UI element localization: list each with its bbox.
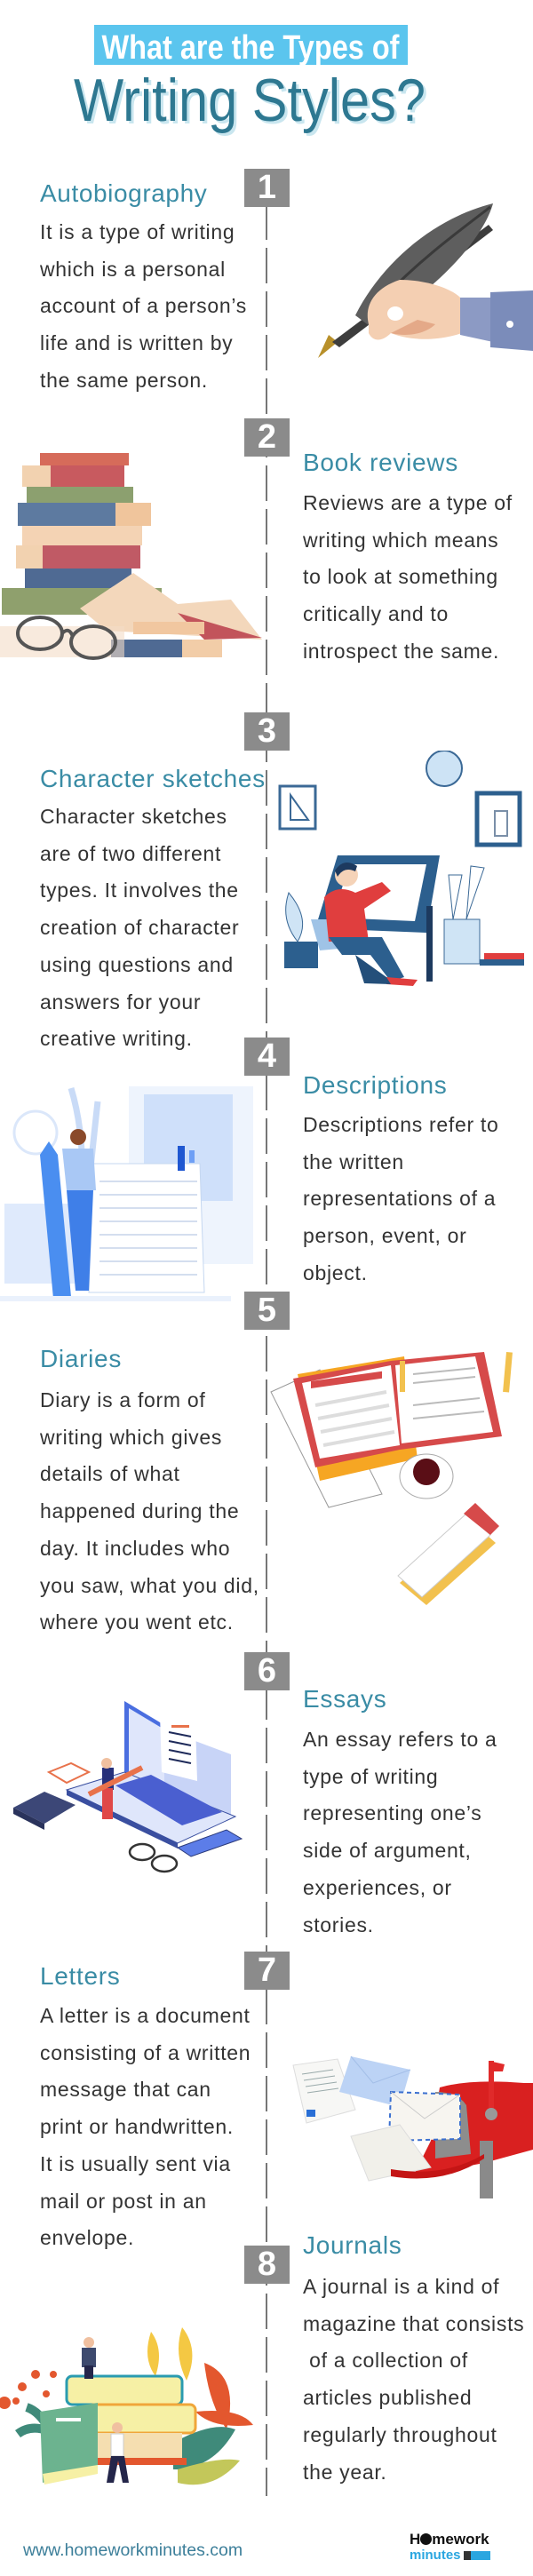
section 3 text: types. It involves the [40,879,239,902]
title banner [94,25,408,65]
icon: open diary with coffee [270,1352,513,1605]
footer url: www.homeworkminutes.com [23,2540,243,2560]
section 1 number [244,169,290,207]
timeline dashed line [266,207,267,2496]
section 6 number [244,1652,290,1690]
section 3 text: creation of character [40,916,239,939]
icon: person at drafting table [279,751,524,986]
section 4 number: 4 [258,1038,276,1075]
section 7 text: It is usually sent via [40,2152,231,2175]
section 5 number: 5 [258,1292,276,1329]
section 3 text: using questions and [40,953,234,976]
section 2 number: 2 [258,418,276,456]
section 2 text: Reviews are a type of [303,491,513,514]
section 5 text: writing which gives [40,1426,222,1449]
section 7 number [244,1952,290,1990]
section 7 text: consisting of a written [40,2041,251,2064]
section 7 text: A letter is a document [40,2004,251,2027]
logo [410,2531,490,2563]
section 4 text: representations of a [303,1187,496,1210]
icon: isometric laptop with person [13,1701,243,1872]
title [74,25,428,137]
section 6 text: side of argument, [303,1839,472,1862]
section 2 text [303,491,513,663]
section 4 number [244,1038,290,1076]
section 2 text: to look at something [303,565,498,588]
section 8 text: the year. [303,2461,387,2484]
title: Writing Styles? [76,69,428,137]
section 5 text: you saw, what you did, [40,1574,259,1597]
section 3 heading: Character sketches [40,765,266,792]
section 1 text [40,220,247,392]
section 2 heading: Book reviews [303,449,458,476]
section 1 text: which is a personal [40,258,226,281]
section 2 text: introspect the same. [303,640,499,663]
logo: H mework [410,2531,489,2548]
section 1 heading: Autobiography [40,179,207,207]
icon: person with giant pencil and paper [0,1086,253,1301]
section 7 text: message that can [40,2078,211,2101]
logo: minutes [410,2548,461,2563]
section 5 number [244,1292,290,1330]
section 4 text: Descriptions refer to [303,1113,499,1136]
section 4 text: the written [303,1150,404,1173]
section 3 number: 3 [258,712,276,750]
section 6 heading: Essays [303,1685,386,1713]
section 6 text: stories. [303,1913,374,1936]
section 3 text: are of two different [40,842,221,865]
section 5 text [40,1388,259,1634]
section 2 text: critically and to [303,602,449,625]
section 1 text: life and is written by [40,331,233,354]
section 8 text [303,2275,524,2484]
section 3 text: creative writing. [40,1027,193,1050]
icon: envelopes and red mailbox [293,2055,533,2198]
section 4 text: person, event, or [303,1224,467,1247]
section 5 text: details of what [40,1462,180,1485]
title: What are the Types of [101,29,400,67]
section 8 text: of a collection of [309,2349,468,2372]
section 1 text: account of a person’s [40,294,247,317]
section 7 text: print or handwritten. [40,2115,234,2138]
section 6 text: An essay refers to a [303,1728,497,1751]
icon: stack of books with glasses [0,453,262,660]
section 8 number [244,2246,290,2284]
section 5 text: happened during the [40,1499,239,1523]
section 2 text: writing which means [303,529,498,552]
section 7 text: envelope. [40,2226,134,2249]
section 7 text: mail or post in an [40,2190,207,2213]
section 8 text: magazine that consists [303,2312,524,2335]
section 4 text [303,1113,499,1284]
section 7 number: 7 [258,1952,276,1989]
section 6 text: experiences, or [303,1876,452,1899]
section 1 number: 1 [258,169,276,206]
section 3 number [244,712,290,751]
section 8 text: regularly throughout [303,2423,497,2446]
section 4 text: object. [303,1261,368,1284]
section 6 text: type of writing [303,1765,438,1788]
section 1 text: It is a type of writing [40,220,235,243]
section 7 text [40,2004,251,2249]
section 5 text: Diary is a form of [40,1388,205,1411]
section 6 text [303,1728,497,1936]
section 3 text: answers for your [40,990,201,1014]
section 5 heading: Diaries [40,1345,122,1372]
section 8 text: articles published [303,2386,472,2409]
section 8 text: A journal is a kind of [303,2275,499,2298]
title: Writing Styles? [74,67,426,134]
section 8 heading: Journals [303,2231,402,2259]
section 3 text [40,805,239,1050]
section 8 number: 8 [258,2246,276,2283]
section 5 text: where you went etc. [40,1610,234,1634]
section 6 number: 6 [258,1652,276,1690]
section 6 text: representing one’s [303,1801,481,1825]
section 5 text: day. It includes who [40,1537,230,1560]
icon: stacked books with people and leaves [0,2327,253,2485]
section 2 number [244,418,290,457]
icon: hand with quill [318,203,533,358]
section 4 heading: Descriptions [303,1071,447,1099]
section 1 text: the same person. [40,369,208,392]
section 3 text: Character sketches [40,805,227,828]
section 7 heading: Letters [40,1962,121,1990]
